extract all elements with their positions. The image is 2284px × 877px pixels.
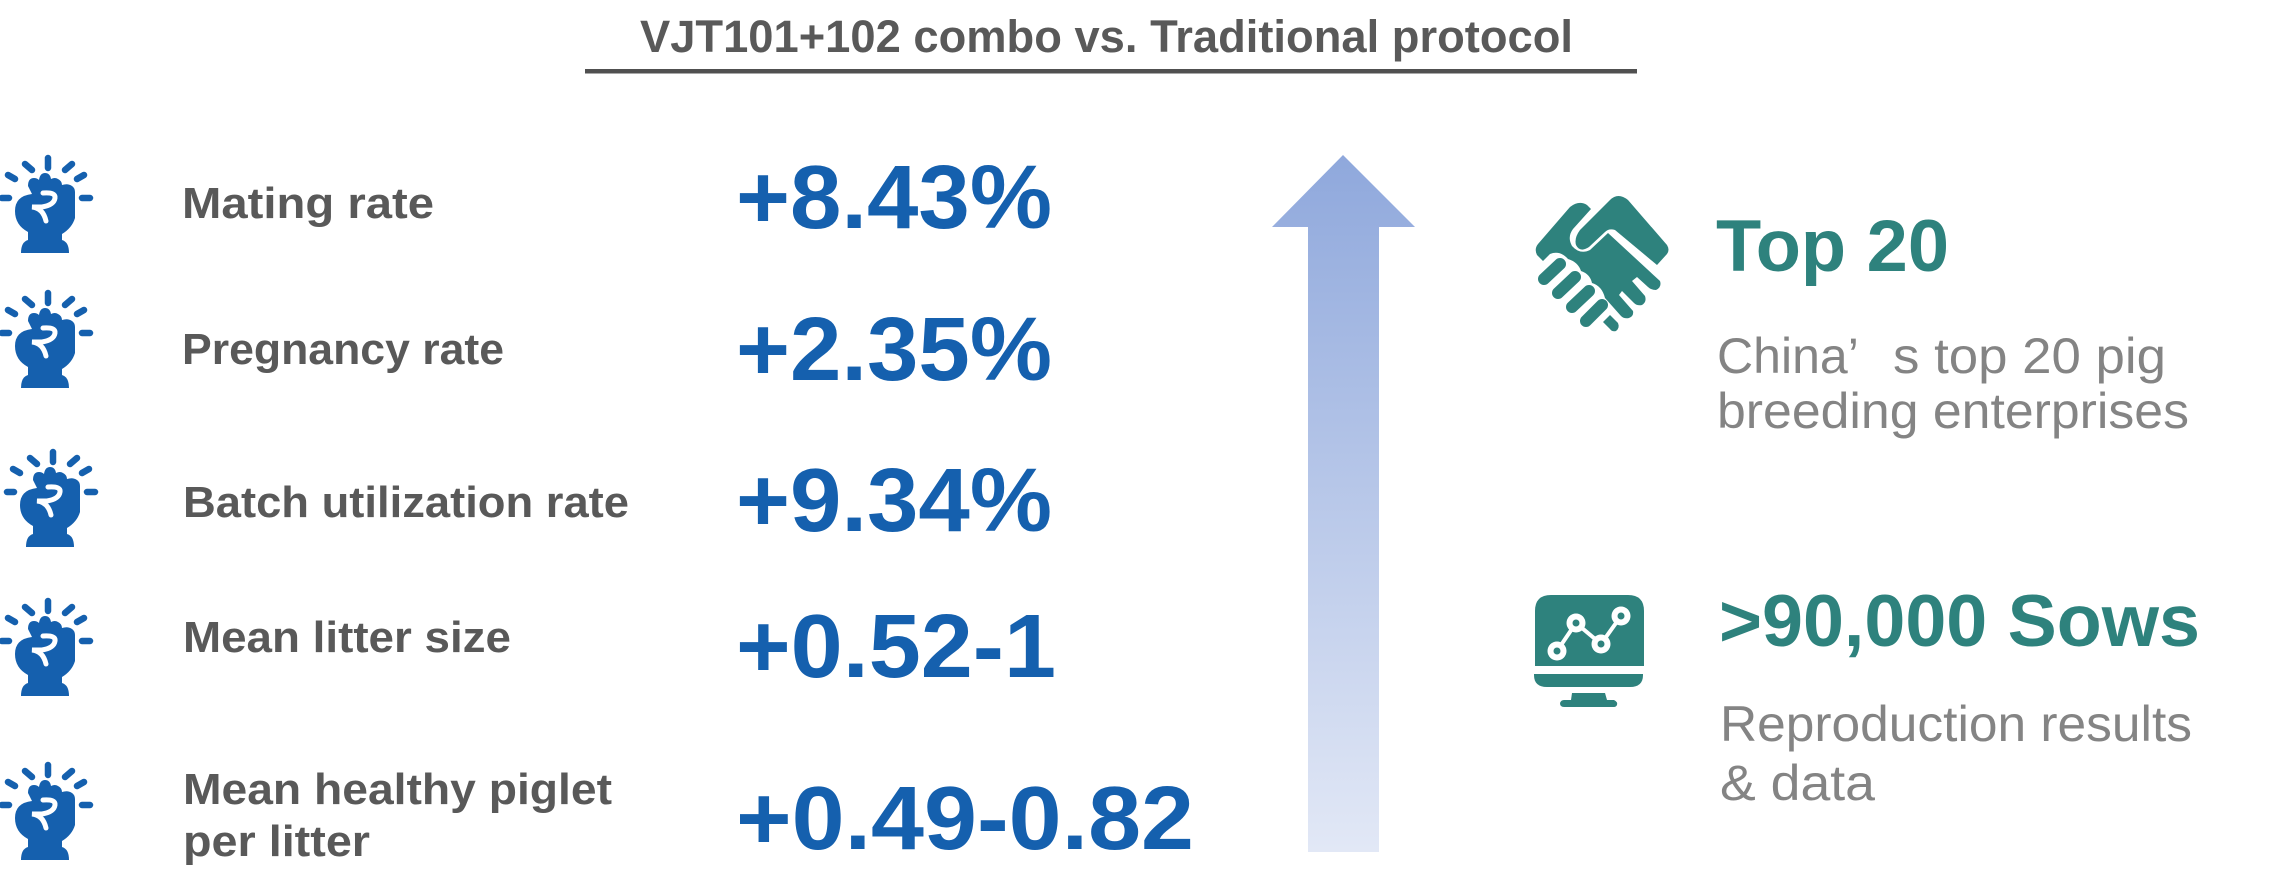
icon: fist 5 — [2, 765, 90, 860]
icon: monitor chart — [1534, 595, 1644, 707]
value: mean litter size: +0.52-1 — [736, 597, 1056, 697]
label: mean healthy piglet per litter — [183, 765, 612, 866]
text: sows description — [1720, 696, 2192, 811]
icon: fist 4 — [2, 601, 90, 696]
heading: sows: >90,000 Sows — [1719, 581, 2200, 662]
value: pregnancy rate: +2.35% — [736, 300, 1052, 400]
text: sows description: Reproduction results — [1720, 696, 2192, 752]
text: sows description: & data — [1720, 755, 1875, 811]
label: batch utilization rate: Batch utilization rate — [183, 478, 629, 527]
arrow: upward gradient — [1272, 155, 1415, 852]
icon: fist 2 — [2, 293, 90, 388]
label: mean healthy piglet per litter: Mean healthy piglet — [183, 765, 612, 814]
label: mean litter size: Mean litter size — [183, 613, 511, 662]
label: mating rate: Mating rate — [182, 179, 434, 228]
title: VJT101+102 combo vs. Traditional protocol — [640, 11, 1573, 62]
label: mean healthy piglet per litter: per litter — [183, 817, 370, 866]
value: mating rate: +8.43% — [736, 148, 1052, 248]
text: top 20 description: breeding enterprises — [1717, 383, 2189, 439]
label: pregnancy rate: Pregnancy rate — [182, 325, 504, 374]
heading: top 20: Top 20 — [1716, 206, 1949, 287]
icon: fist 3 — [7, 452, 95, 547]
icon: fist 1 — [2, 158, 90, 253]
text: top 20 description — [1717, 328, 2189, 439]
text: top 20 description: s top 20 pig — [1893, 328, 2166, 384]
text: top 20 description: China’ — [1717, 328, 1857, 384]
value: batch utilization rate: +9.34% — [736, 451, 1052, 551]
icon: handshake — [1536, 196, 1668, 331]
value: mean healthy piglet: +0.49-0.82 — [736, 769, 1194, 869]
